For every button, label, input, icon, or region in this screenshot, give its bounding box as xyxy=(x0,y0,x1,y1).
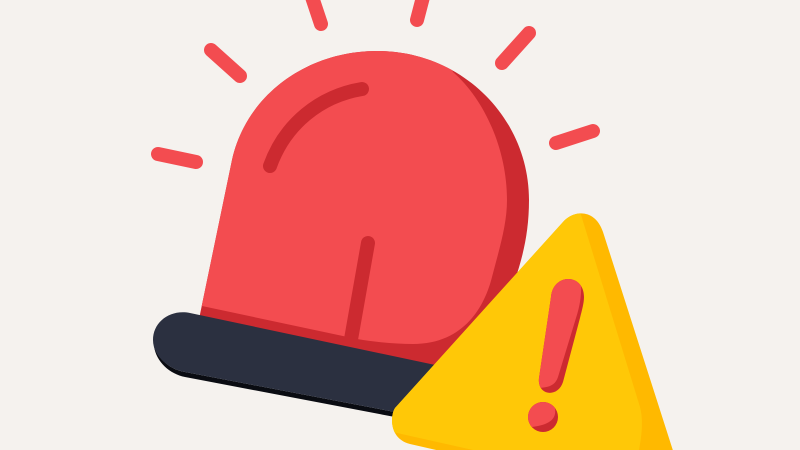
icon: light rays xyxy=(158,0,593,162)
dome highlight xyxy=(270,89,362,166)
exclamation bar xyxy=(538,279,584,393)
icon: siren dome xyxy=(200,51,529,365)
icon: warning triangle xyxy=(392,213,673,450)
icon: siren base xyxy=(153,312,440,417)
exclamation dot xyxy=(528,402,558,432)
dome centre seam xyxy=(350,243,368,345)
